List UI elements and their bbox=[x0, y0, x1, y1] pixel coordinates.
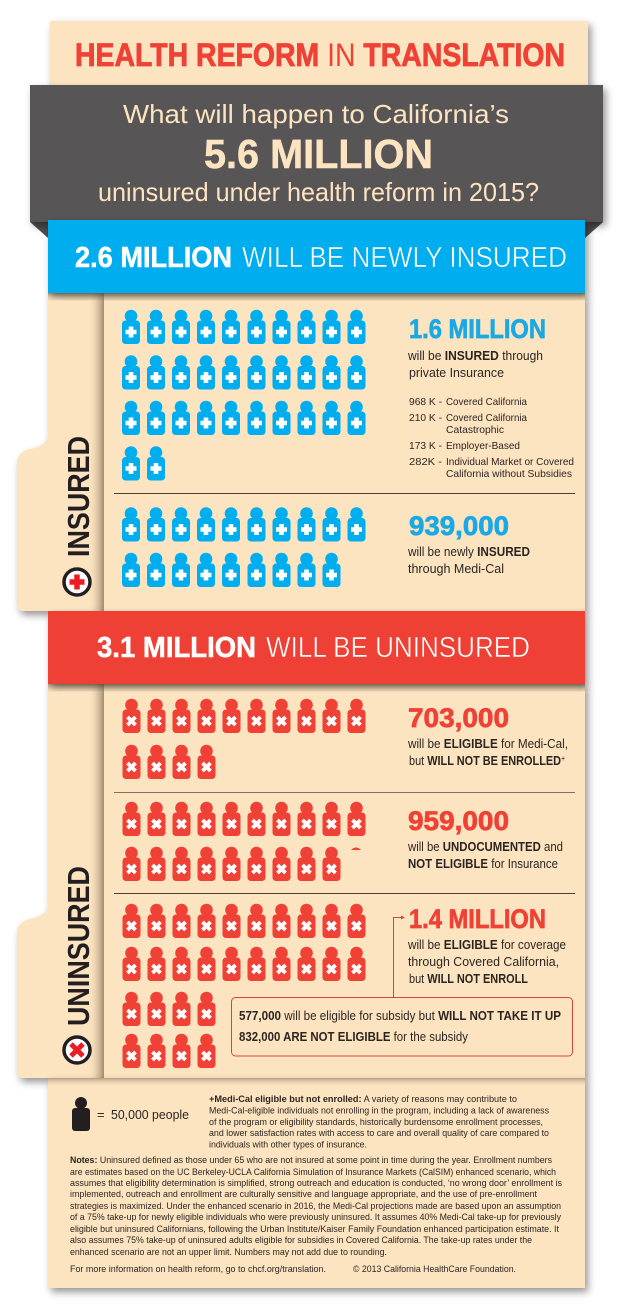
breakdown list: 968 K - bbox=[409, 396, 442, 408]
pictogram: 1.4 million bbox=[122, 904, 366, 1068]
banner: newly insured: 2.6 MILLION bbox=[75, 242, 232, 274]
callout: subsidy breakdown: 577,000 will be eligible for subsidy but WILL NOT TAKE IT UP bbox=[239, 1008, 561, 1023]
icon: plus badge bbox=[64, 569, 90, 595]
notes text: implemented, outreach and enrollment are culturally sensitive and language appropriate, and the use of pre-enrollment bbox=[70, 1189, 537, 1199]
notes text: enhanced scenario are not an upper limit. Numbers may not add due to rounding. bbox=[70, 1247, 387, 1257]
arrow: connector to 1.4 million bbox=[394, 916, 405, 997]
spine label: insured: INSURED bbox=[61, 436, 96, 557]
pictogram: 939,000 Medi-Cal bbox=[122, 507, 366, 587]
stat: 1.4 million: 1.4 MILLION bbox=[409, 904, 546, 934]
question line one: What will happen to California’s bbox=[123, 99, 509, 129]
legend: one figure equals 50,000 people: 50,000 people bbox=[111, 1107, 189, 1122]
panel: footer notes bbox=[48, 1078, 585, 1288]
banner: newly insured bbox=[48, 220, 585, 293]
title: HEALTH REFORM IN TRANSLATION bbox=[75, 37, 565, 73]
callout: subsidy breakdown: 832,000 ARE NOT ELIGIBLE for the subsidy bbox=[239, 1029, 468, 1044]
notes text bbox=[70, 1155, 562, 1257]
stat: 703,000: + bbox=[561, 754, 565, 763]
footnote: Medi-Cal eligible: individuals with other types of insurance. bbox=[209, 1140, 367, 1150]
banner: uninsured bbox=[48, 611, 585, 684]
spine label: insured bbox=[61, 436, 96, 595]
pictogram: 959,000 bbox=[122, 802, 366, 881]
dark question banner bbox=[30, 85, 603, 238]
stat: 959,000: will be UNDOCUMENTED and bbox=[407, 839, 563, 854]
stat: 939,000: will be newly INSURED bbox=[407, 544, 530, 559]
notes text: strategies is maximized. Under the enhanced scenario in 2016, the Medi-Cal projections made are based upon an assumption bbox=[70, 1201, 561, 1211]
footer links and copyright bbox=[70, 1264, 516, 1274]
header panel bbox=[50, 21, 588, 91]
breakdown list: Individual Market or Covered bbox=[446, 456, 574, 468]
notes text: also assumes 75% take-up of uninsured adults eligible for subsidies in Covered California. The take-up rates under the bbox=[70, 1235, 532, 1245]
pictogram: 703,000 bbox=[122, 699, 366, 779]
question line two: uninsured under health reform in 2015? bbox=[98, 177, 539, 207]
stat: 1.6 million private insurance: private Insurance bbox=[409, 365, 504, 380]
notes text: Notes: Uninsured defined as those under 65 who are not insured at some point in time during the year. Enrollment numbers bbox=[70, 1155, 552, 1165]
stat: 939,000 bbox=[407, 511, 530, 576]
stat: 1.4 million: through Covered California, bbox=[408, 954, 559, 969]
stat: 1.6 million private insurance: 1.6 MILLION bbox=[409, 314, 546, 344]
stat: 939,000: 939,000 bbox=[409, 511, 509, 541]
notes text: are estimates based on the UC Berkeley-UCLA California Simulation of Insurance Markets (CalSIM) enhanced scenario, which bbox=[70, 1167, 556, 1177]
notes text: of a 75% take-up for newly eligible individuals who were previously uninsured. It assumes 40% Medi-Cal take-up for previously bbox=[70, 1212, 561, 1222]
footnote: Medi-Cal eligible: and lower satisfaction rates with access to care and overall quality of care compared to bbox=[209, 1128, 549, 1138]
breakdown list: 173 K - bbox=[409, 440, 442, 452]
footer links and copyright: For more information on health reform, go to chcf.org/translation. bbox=[70, 1264, 326, 1274]
notes text: eligible but uninsured Californians, following the Urban Institute/Kaiser Family Foundation enhanced participation estimate. It bbox=[70, 1224, 559, 1234]
breakdown list: 282K - bbox=[409, 456, 443, 468]
footnote: Medi-Cal eligible: of the program or eligibility standards, historically burdensome enrollment processes, bbox=[209, 1117, 543, 1127]
spine label: uninsured: UNINSURED bbox=[61, 866, 96, 1026]
footer links and copyright: © 2013 California HealthCare Foundation. bbox=[353, 1264, 516, 1274]
stat: 703,000: will be ELIGIBLE for Medi-Cal, bbox=[407, 736, 568, 751]
breakdown list: Employer-Based bbox=[446, 440, 520, 452]
stat: 703,000 bbox=[407, 703, 568, 768]
stat: 1.4 million: but WILL NOT ENROLL bbox=[409, 971, 528, 986]
banner: uninsured: 3.1 MILLION bbox=[97, 632, 256, 664]
pictogram: 1.6 million insured bbox=[122, 310, 366, 480]
stat: 1.4 million: will be ELIGIBLE for coverage bbox=[407, 937, 566, 952]
breakdown list: Catastrophic bbox=[446, 424, 504, 436]
breakdown list: California without Subsidies bbox=[446, 468, 572, 480]
panel: uninsured folder bbox=[17, 684, 585, 1078]
stat: 703,000: 703,000 bbox=[408, 703, 509, 733]
stat: 939,000: through Medi-Cal bbox=[408, 561, 504, 576]
footnote: Medi-Cal eligible: Medi-Cal-eligible individuals not enrolling in the program, including a lack of awareness bbox=[209, 1106, 549, 1116]
panel: insured folder bbox=[17, 293, 585, 611]
footnote: Medi-Cal eligible bbox=[209, 1094, 549, 1150]
legend: one figure equals 50,000 people: = bbox=[97, 1107, 105, 1122]
stat: 1.6 million private insurance bbox=[407, 314, 546, 380]
icon: x badge bbox=[64, 1037, 90, 1063]
stat: 1.4 million bbox=[407, 904, 566, 986]
breakdown list: Covered California bbox=[446, 396, 527, 408]
headline number 5.6 million: 5.6 MILLION bbox=[204, 131, 433, 177]
stat: 1.6 million private insurance: will be INSURED through bbox=[407, 348, 543, 363]
stat: 703,000: but WILL NOT BE ENROLLED bbox=[409, 753, 587, 768]
stat: 959,000: NOT ELIGIBLE for Insurance bbox=[408, 856, 558, 871]
callout: subsidy breakdown bbox=[232, 998, 572, 1056]
breakdown list: 210 K - bbox=[409, 412, 442, 424]
banner: uninsured: WILL BE UNINSURED bbox=[266, 632, 530, 664]
legend: one figure equals 50,000 people bbox=[72, 1097, 189, 1131]
footnote: Medi-Cal eligible: +Medi-Cal eligible but not enrolled: A variety of reasons may contribute to bbox=[209, 1094, 517, 1104]
breakdown list bbox=[409, 396, 574, 480]
notes text: assumes that eligibility determination is simplified, strong outreach and education is conducted, ‘no wrong door’ enrollment is bbox=[70, 1178, 562, 1188]
stat: 959,000: 959,000 bbox=[408, 806, 509, 836]
breakdown list: Covered California bbox=[446, 412, 527, 424]
stat: 959,000 bbox=[407, 806, 563, 871]
banner: newly insured: WILL BE NEWLY INSURED bbox=[242, 242, 567, 274]
